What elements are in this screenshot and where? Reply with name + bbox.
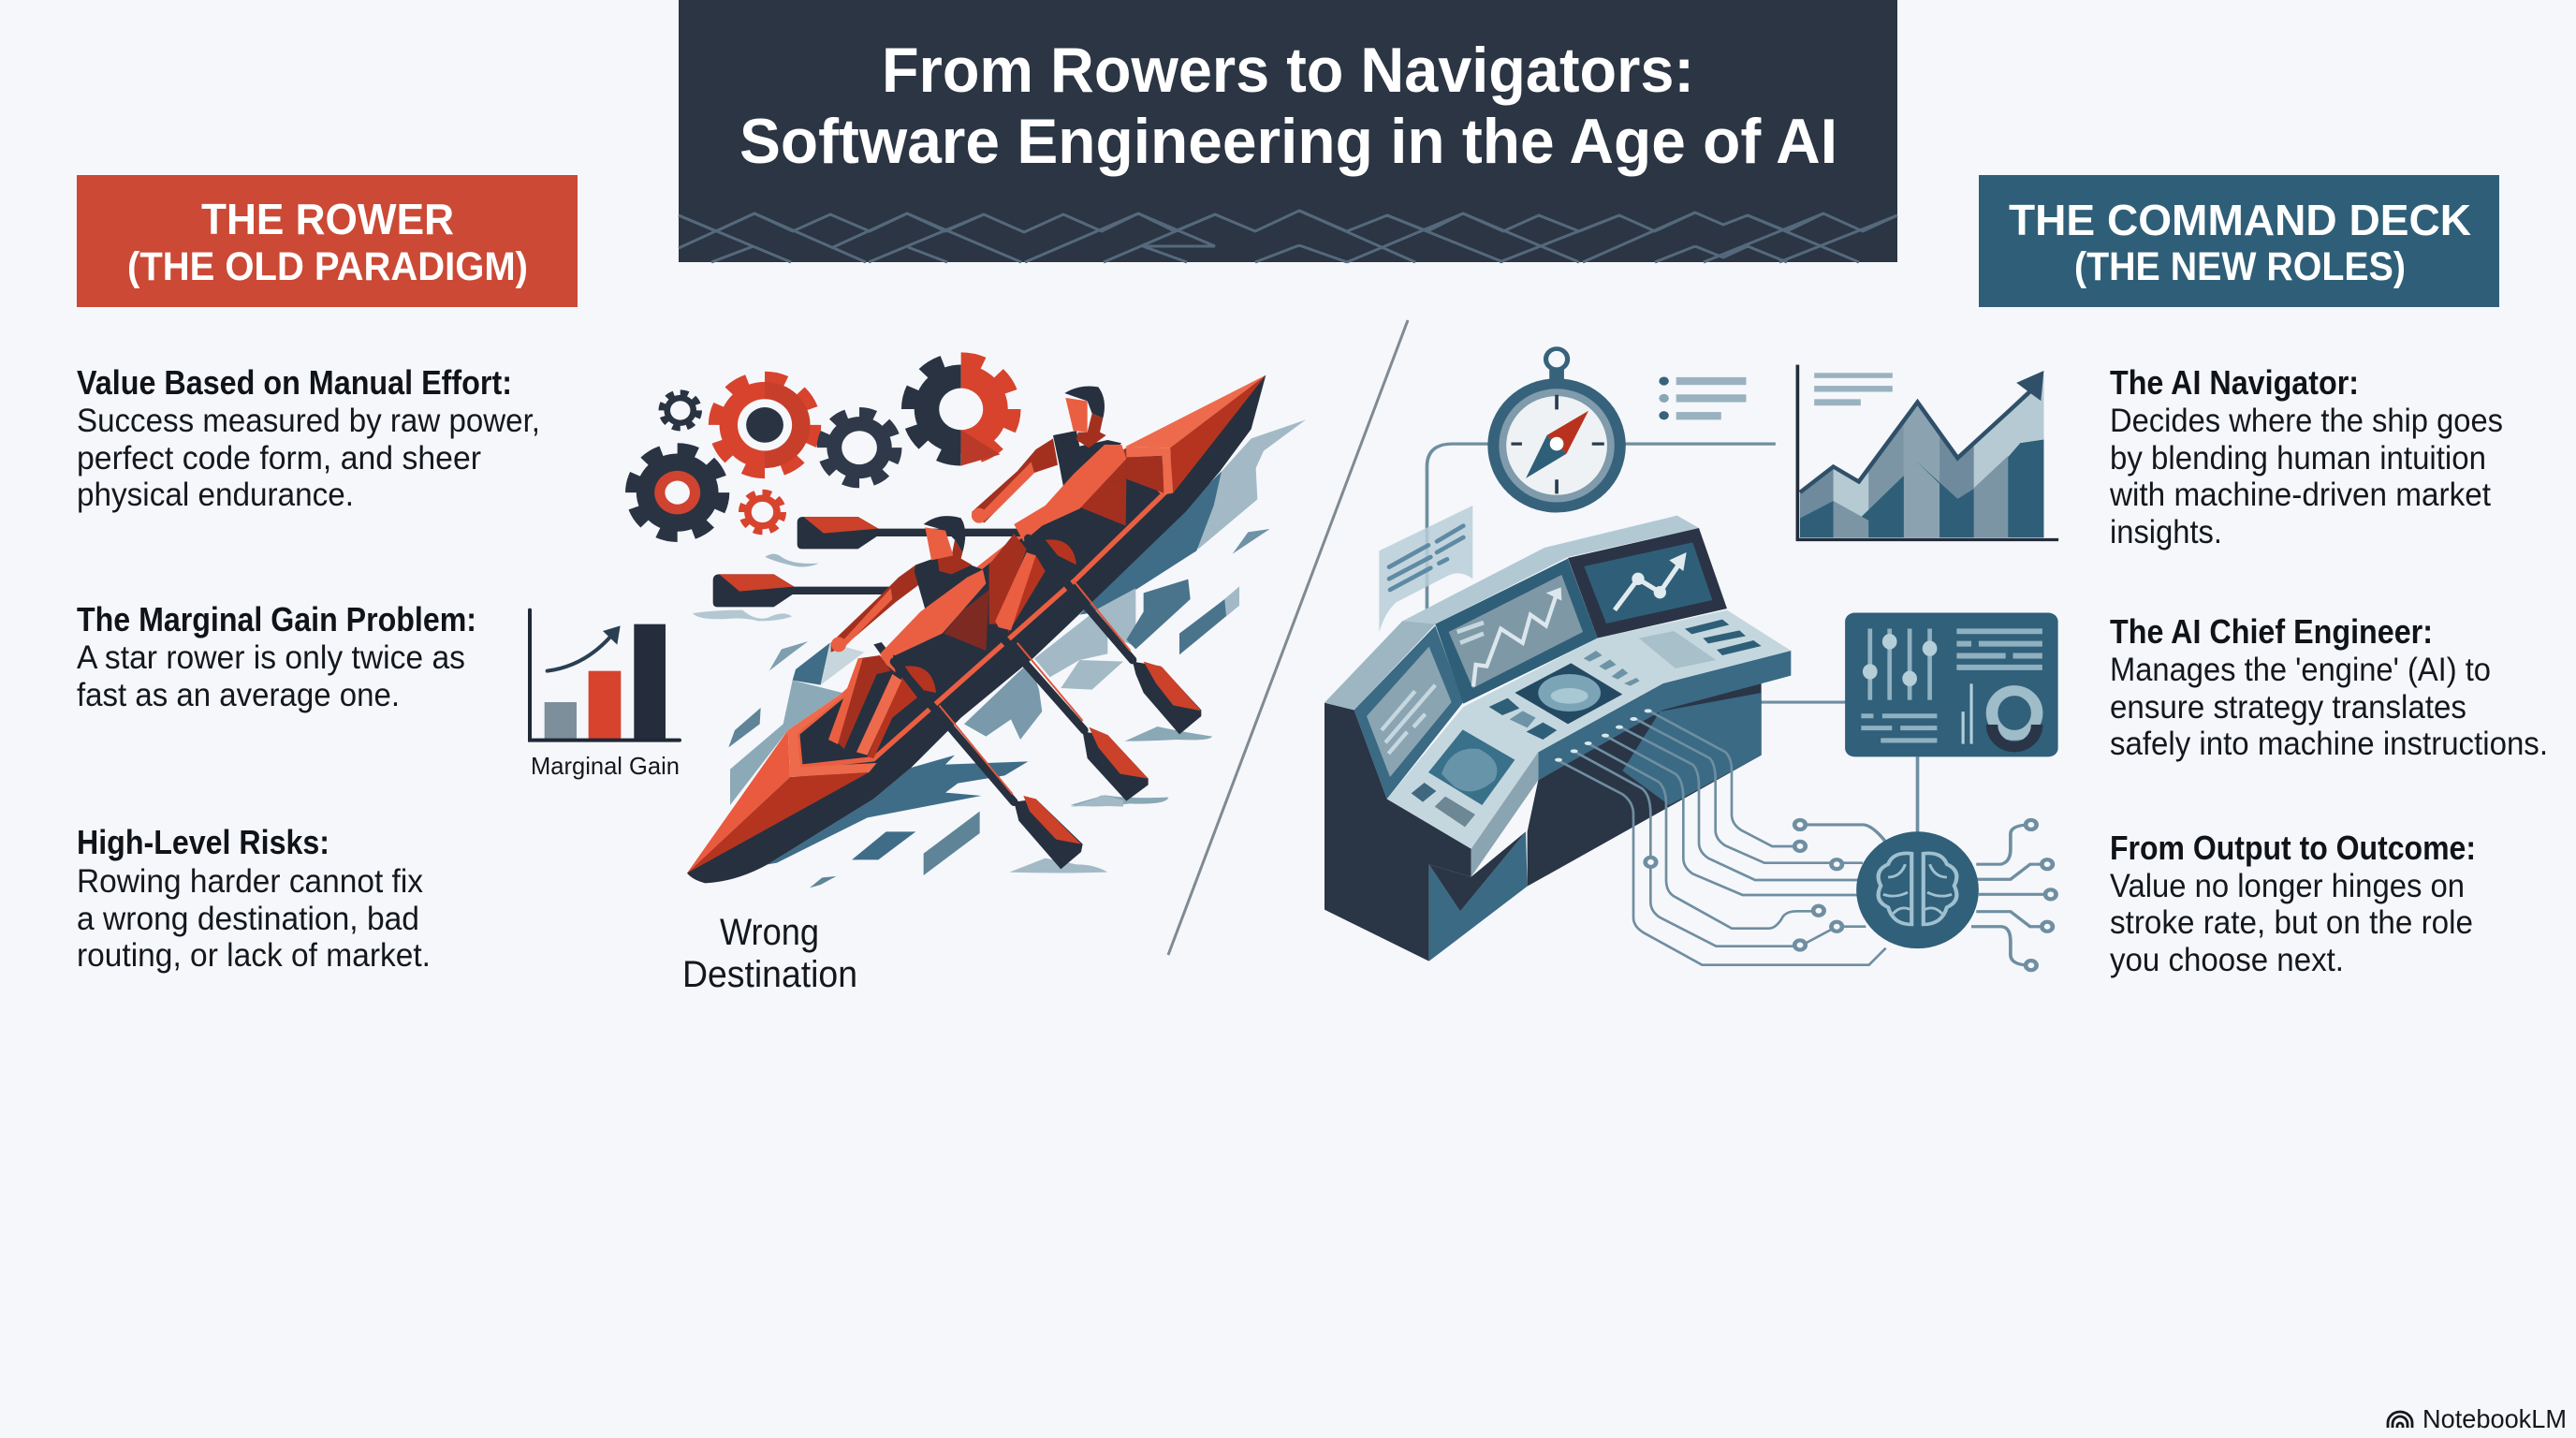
text block: value based on manual effort: perfect code form, and sheer xyxy=(77,440,481,477)
circuit nodes xyxy=(1646,820,2056,970)
text block: the marginal gain problem: The Marginal Gain Problem: xyxy=(77,600,476,638)
icon: compass xyxy=(1487,349,1626,513)
text block: the ai chief engineer xyxy=(2110,612,2548,762)
text block: the marginal gain problem: fast as an average one. xyxy=(77,677,400,713)
divider line xyxy=(1168,320,1408,955)
chart: marginal gain bars xyxy=(530,610,680,741)
title text line 2: Software Engineering in the Age of AI xyxy=(739,106,1837,177)
text block: the ai navigator xyxy=(2109,363,2503,550)
horizontal oars xyxy=(713,517,1020,607)
illustration: gears xyxy=(632,348,1025,536)
legend list xyxy=(1659,376,1746,419)
gear small red xyxy=(742,492,783,532)
text block: the ai chief engineer: Manages the 'engine' (AI) to xyxy=(2110,652,2491,688)
text block: from output to outcome xyxy=(2110,829,2476,978)
text block: the ai chief engineer: safely into machine instructions. xyxy=(2110,726,2548,762)
text block: the ai navigator: with machine-driven market xyxy=(2109,477,2491,513)
title banner xyxy=(679,0,1897,262)
text block: the ai chief engineer: ensure strategy translates xyxy=(2110,689,2466,726)
illustration: command console xyxy=(1325,506,1886,965)
text block: high-level risks: High-Level Risks: xyxy=(77,823,329,861)
text block: from output to outcome: you choose next. xyxy=(2110,942,2344,978)
label: wrong destination: Destination xyxy=(682,954,857,995)
text block: the ai chief engineer: The AI Chief Engineer: xyxy=(2110,612,2433,651)
gear large dark xyxy=(632,449,724,536)
right circuit wires xyxy=(1800,825,2050,965)
illustration: ai brain and control panel xyxy=(1646,613,2058,970)
gear red xyxy=(715,377,814,472)
text block: the marginal gain problem: A star rower is only twice as xyxy=(77,639,465,676)
console port highlights xyxy=(1555,709,1652,762)
panel heading: the command deck: THE COMMAND DECK xyxy=(2009,196,2471,244)
text block: from output to outcome: From Output to Outcome: xyxy=(2110,829,2476,867)
text block: value based on manual effort: Value Based on Manual Effort: xyxy=(77,363,512,402)
water around the bow xyxy=(693,554,1123,888)
engine control panel xyxy=(1845,613,2058,756)
text block: value based on manual effort xyxy=(77,363,540,513)
illustration: rowers and kayak xyxy=(687,375,1306,888)
label: wrong destination: Wrong xyxy=(720,912,819,953)
gear medium dark xyxy=(823,413,896,482)
gear small dark xyxy=(662,392,699,428)
illustration: navigation tools xyxy=(1427,349,2058,834)
chart label: marginal gain: Marginal Gain xyxy=(531,752,680,780)
panel heading: the rower: (THE OLD PARADIGM) xyxy=(127,244,528,289)
rear rower xyxy=(972,386,1126,634)
console body xyxy=(1325,516,1791,961)
title text: From Rowers to Navigators: xyxy=(882,35,1694,106)
text block: the marginal gain problem xyxy=(77,600,476,713)
text block: the ai navigator: Decides where the ship goes xyxy=(2110,403,2503,439)
text block: the ai navigator: by blending human intuition xyxy=(2110,440,2486,477)
icon: ai brain xyxy=(1856,831,1979,948)
chart: market area chart xyxy=(1797,365,2058,539)
diagonal oars xyxy=(894,538,1201,869)
text block: high-level risks: routing, or lack of market. xyxy=(77,937,431,974)
note bubble xyxy=(1379,506,1472,632)
panel heading: the command deck: (THE NEW ROLES) xyxy=(2074,244,2406,289)
text block: the ai navigator: insights. xyxy=(2110,514,2222,550)
text block: high-level risks: Rowing harder cannot fix xyxy=(77,863,423,900)
console wiring xyxy=(1557,710,1886,965)
text block: from output to outcome: Value no longer hinges on xyxy=(2110,868,2465,904)
text block: value based on manual effort: Success measured by raw power, xyxy=(77,403,540,439)
kayak hull xyxy=(687,375,1266,883)
text block: high-level risks xyxy=(77,823,431,974)
front rower legs xyxy=(828,655,936,758)
brand: notebooklm: NotebookLM xyxy=(2422,1404,2567,1433)
panel heading: the command deck xyxy=(1979,175,2499,307)
text block: value based on manual effort: physical endurance. xyxy=(77,477,354,513)
text block: high-level risks: a wrong destination, bad xyxy=(77,901,419,937)
label: wrong destination xyxy=(682,912,857,995)
connector lines xyxy=(1427,444,1918,834)
water behind and around the stern xyxy=(964,419,1306,806)
panel heading: the rower xyxy=(77,175,578,307)
text block: the ai navigator: The AI Navigator: xyxy=(2110,363,2359,402)
gear half dark half red xyxy=(909,348,1025,470)
front rower xyxy=(831,516,989,672)
text block: from output to outcome: stroke rate, but on the role xyxy=(2110,904,2473,941)
panel heading: the rower: THE ROWER xyxy=(201,195,454,243)
